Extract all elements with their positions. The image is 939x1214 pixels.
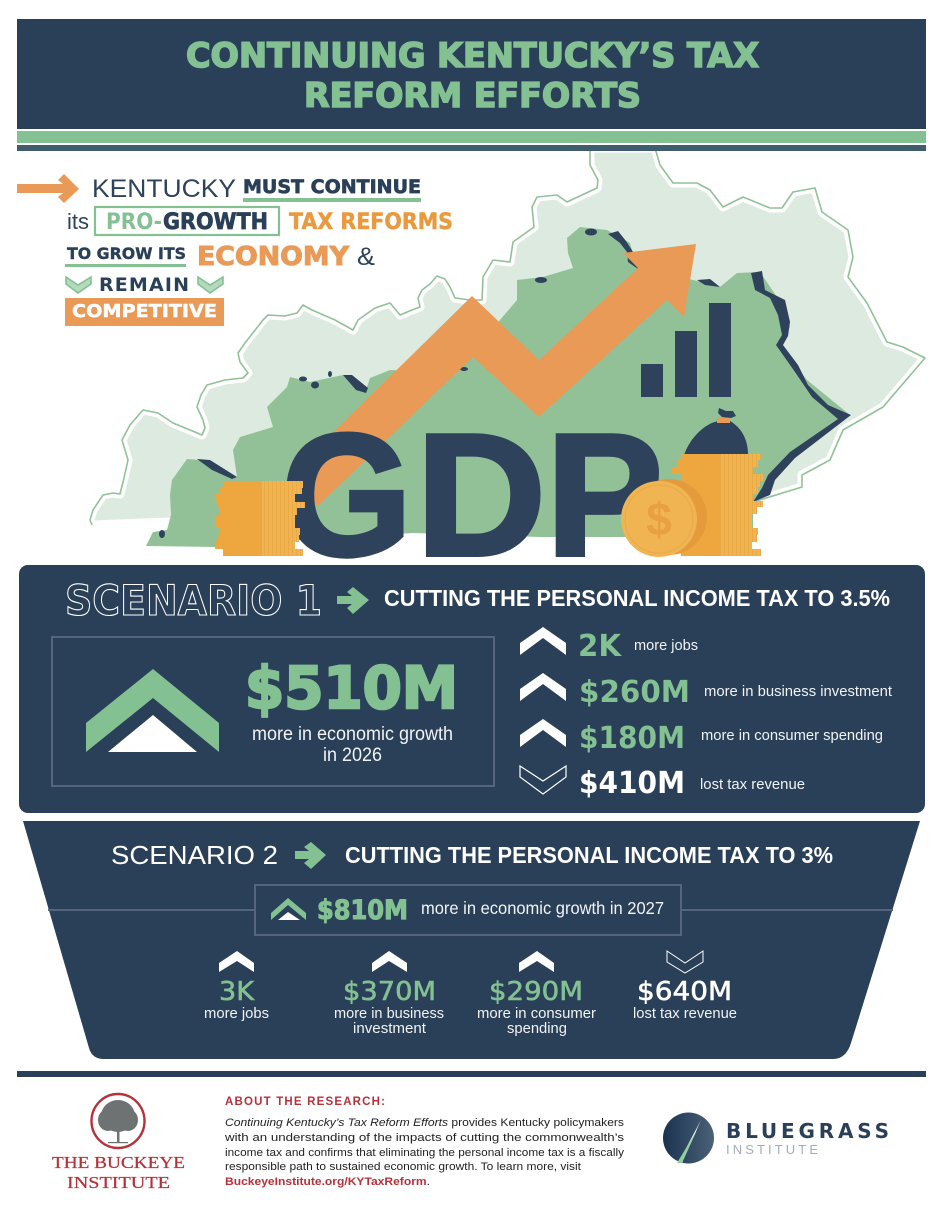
icon: dollar coin: $ xyxy=(646,493,672,545)
stat: lost tax revenue xyxy=(633,951,737,1022)
logo: The Buckeye Institute: INSTITUTE xyxy=(67,1173,170,1192)
stat: consumer spending xyxy=(477,951,596,1037)
GDP lettering P: P xyxy=(546,397,663,592)
stat: jobs: 2K xyxy=(578,629,623,664)
panel: scenario 2 xyxy=(23,821,920,1059)
stat: business investment: investment xyxy=(353,1020,427,1037)
scenario 2 heading: SCENARIO 2 xyxy=(111,840,278,870)
main stat box: more in economic growth xyxy=(252,724,453,745)
competitive badge: COMPETITIVE xyxy=(72,301,217,322)
stat: consumer spending: $290M xyxy=(489,977,583,1007)
title banner: CONTINUING KENTUCKY’S TAX xyxy=(186,36,759,76)
map river borders xyxy=(159,228,851,538)
icon: orange arrow xyxy=(17,174,79,203)
headline line 1 xyxy=(92,175,421,203)
GDP lettering: G xyxy=(281,397,412,592)
about the research: with an understanding of the impacts of cutting the commonwealth’s xyxy=(224,1132,625,1144)
icon: dollar coin xyxy=(621,479,707,557)
logo: The Buckeye Institute: THE BUCKEYE xyxy=(52,1153,185,1172)
stat: jobs xyxy=(520,627,698,664)
stat: consumer spending: $180M xyxy=(579,721,685,756)
headline line 2 xyxy=(67,207,453,235)
stat: business investment: more in business xyxy=(334,1005,444,1022)
main stat box: $510M xyxy=(245,654,458,722)
headline line 3: & xyxy=(357,243,375,271)
about the research: responsible path to sustained economic growth. To learn more, visit xyxy=(225,1161,581,1173)
stat: business investment: more in business investment xyxy=(704,683,893,700)
stat: business investment: $370M xyxy=(343,977,436,1007)
scenario 1 heading: SCENARIO 1 xyxy=(65,576,322,625)
scenario 1 subheading: CUTTING THE PERSONAL INCOME TAX TO 3.5% xyxy=(384,585,890,611)
logo: Bluegrass Institute xyxy=(663,1112,889,1164)
about the research: BuckeyeInstitute.org/KYTaxReform . xyxy=(225,1176,430,1188)
stat: consumer spending: more in consumer spending xyxy=(701,727,883,744)
logo: Bluegrass Institute: BLUEGRASS xyxy=(726,1119,889,1143)
stat: consumer spending xyxy=(520,719,883,756)
headline line 3 xyxy=(65,242,375,272)
stat: lost tax revenue: lost tax revenue xyxy=(633,1005,737,1022)
about the research: income tax and confirms that eliminating the personal income tax is a fiscally xyxy=(225,1147,625,1159)
title banner: REFORM EFFORTS xyxy=(304,76,641,116)
stat: jobs: 3K xyxy=(219,977,255,1007)
headline line 2: its xyxy=(67,209,89,234)
title banner xyxy=(17,19,926,129)
stat: jobs: more jobs xyxy=(204,1005,269,1022)
headline line 3: ECONOMY xyxy=(197,242,350,272)
main stat box xyxy=(48,885,893,935)
stat: jobs: more jobs xyxy=(634,637,698,654)
about the research: Continuing Kentucky’s Tax Reform Efforts provides Kentucky policymakers xyxy=(225,1117,625,1129)
GDP lettering D: D xyxy=(416,397,546,592)
headline: Kentucky must continue xyxy=(17,174,453,326)
footer rule xyxy=(17,1071,926,1077)
stat: consumer spending: more in consumer xyxy=(477,1005,596,1022)
headline line 4 with chevrons: REMAIN xyxy=(99,274,189,296)
arrow xyxy=(337,587,369,614)
stat: lost tax revenue: $410M xyxy=(579,766,685,801)
stat: lost tax revenue xyxy=(520,766,805,801)
main stat box: more in economic growth in 2027 xyxy=(421,898,664,918)
competitive badge xyxy=(65,298,224,326)
stat: business investment: $260M xyxy=(579,675,690,710)
main stat box: $810M xyxy=(317,895,408,926)
illustration: Kentucky map with GDP growth xyxy=(90,148,925,592)
about the research: ABOUT THE RESEARCH: xyxy=(225,1096,385,1108)
stat: jobs xyxy=(204,951,269,1022)
map inner green region xyxy=(146,227,850,547)
headline line 1: MUST CONTINUE xyxy=(243,176,421,198)
panel: scenario 1 xyxy=(19,565,925,813)
stat: business investment xyxy=(520,673,893,710)
stat: lost tax revenue: lost tax revenue xyxy=(700,776,805,793)
stat: consumer spending: spending xyxy=(507,1020,567,1037)
main stat box: in 2026 xyxy=(323,745,382,766)
bar chart icon xyxy=(641,303,731,397)
arrow xyxy=(295,842,326,869)
stat: lost tax revenue: $640M xyxy=(637,977,732,1007)
icon: money bag xyxy=(684,408,748,455)
stat: business investment xyxy=(334,951,444,1037)
headline line 2: PRO- xyxy=(106,210,162,235)
icon: left coin stack xyxy=(215,481,305,556)
about the research xyxy=(224,1096,625,1188)
headline line 4 with chevrons xyxy=(66,274,223,296)
map outline and light fill xyxy=(90,148,925,530)
green title rule xyxy=(17,131,926,143)
headline line 3: TO GROW ITS xyxy=(67,244,186,263)
scenario 2 subheading: CUTTING THE PERSONAL INCOME TAX TO 3% xyxy=(345,842,833,868)
logo: Bluegrass Institute: INSTITUTE xyxy=(726,1142,818,1157)
teal title rule xyxy=(17,145,926,151)
main stat box xyxy=(52,637,494,786)
headline line 2: GROWTH xyxy=(163,210,268,235)
headline line 2: TAX REFORMS xyxy=(289,210,453,235)
logo: The Buckeye Institute xyxy=(52,1094,185,1192)
headline line 1: KENTUCKY xyxy=(92,175,236,203)
icon: right coin stack xyxy=(672,454,763,556)
growth arrow xyxy=(300,244,696,507)
